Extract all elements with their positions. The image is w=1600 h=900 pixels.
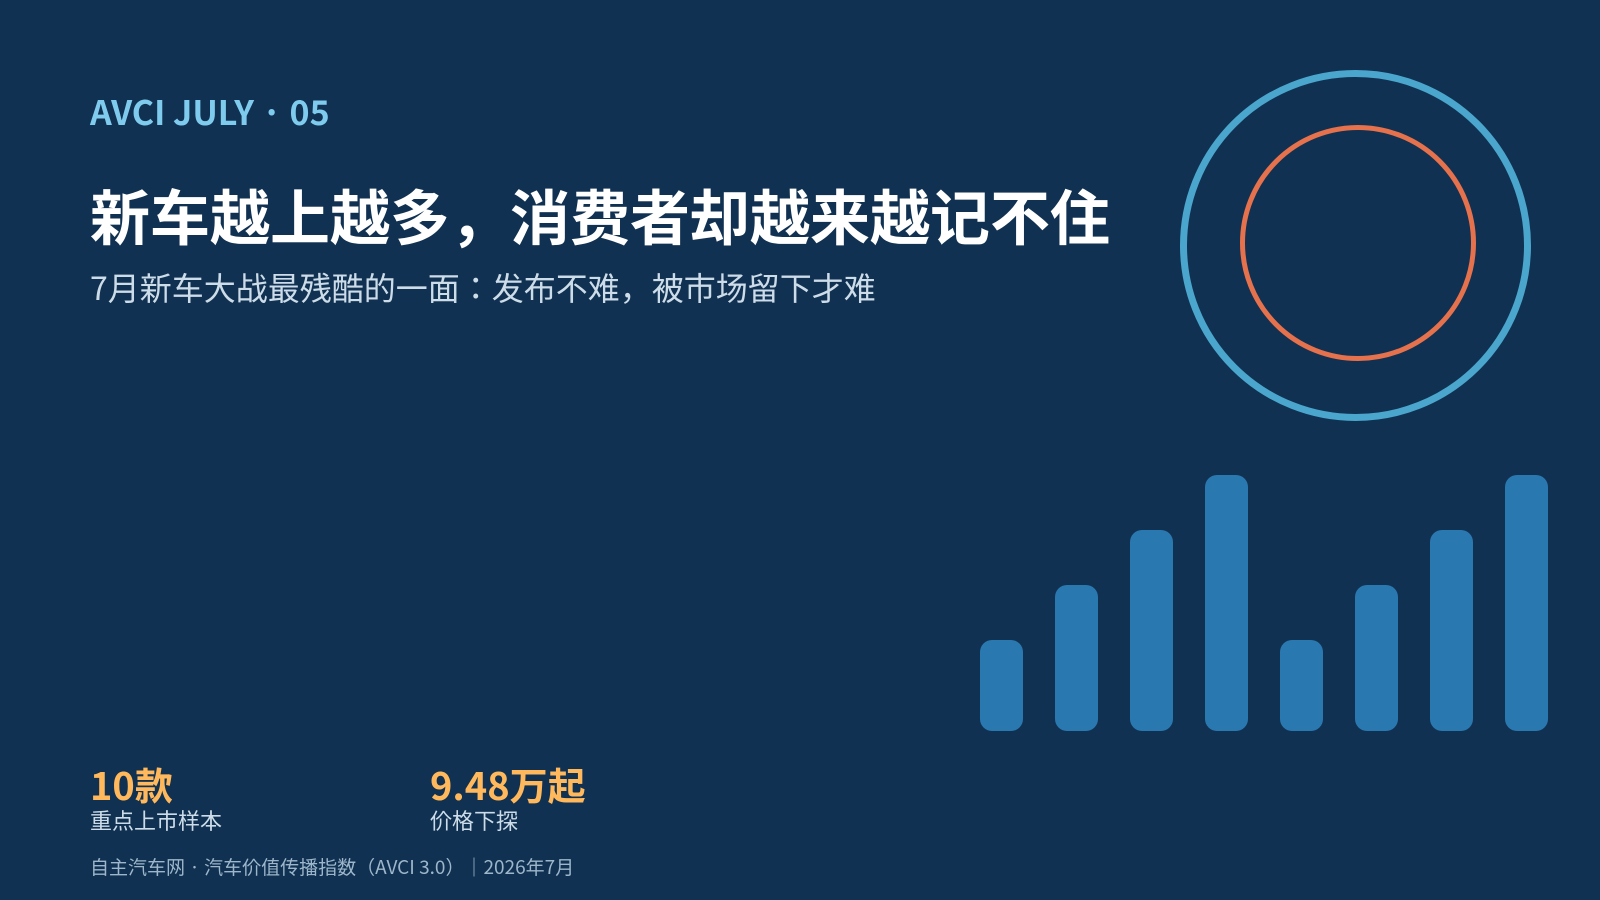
decorative concentric circles [1184,74,1528,418]
title: 新车越上越多，消费者却越来越记不住 [90,171,1110,258]
footer source line: 自主汽车网 · 汽车价值传播指数（AVCI 3.0）｜2026年7月 [90,853,574,880]
stat value: 9.48万起 [430,756,586,811]
stat label: 重点上市样本 [90,804,222,836]
stat: starting price [430,756,586,836]
subtitle: 7月新车大战最残酷的一面：发布不难，被市场留下才难 [90,264,876,310]
stat: sample count [90,756,222,836]
eyebrow label: AVCI JULY · 05 [90,86,330,135]
stat value: 10款 [90,756,173,811]
decorative bar chart [980,475,1548,731]
stat label: 价格下探 [430,804,518,836]
